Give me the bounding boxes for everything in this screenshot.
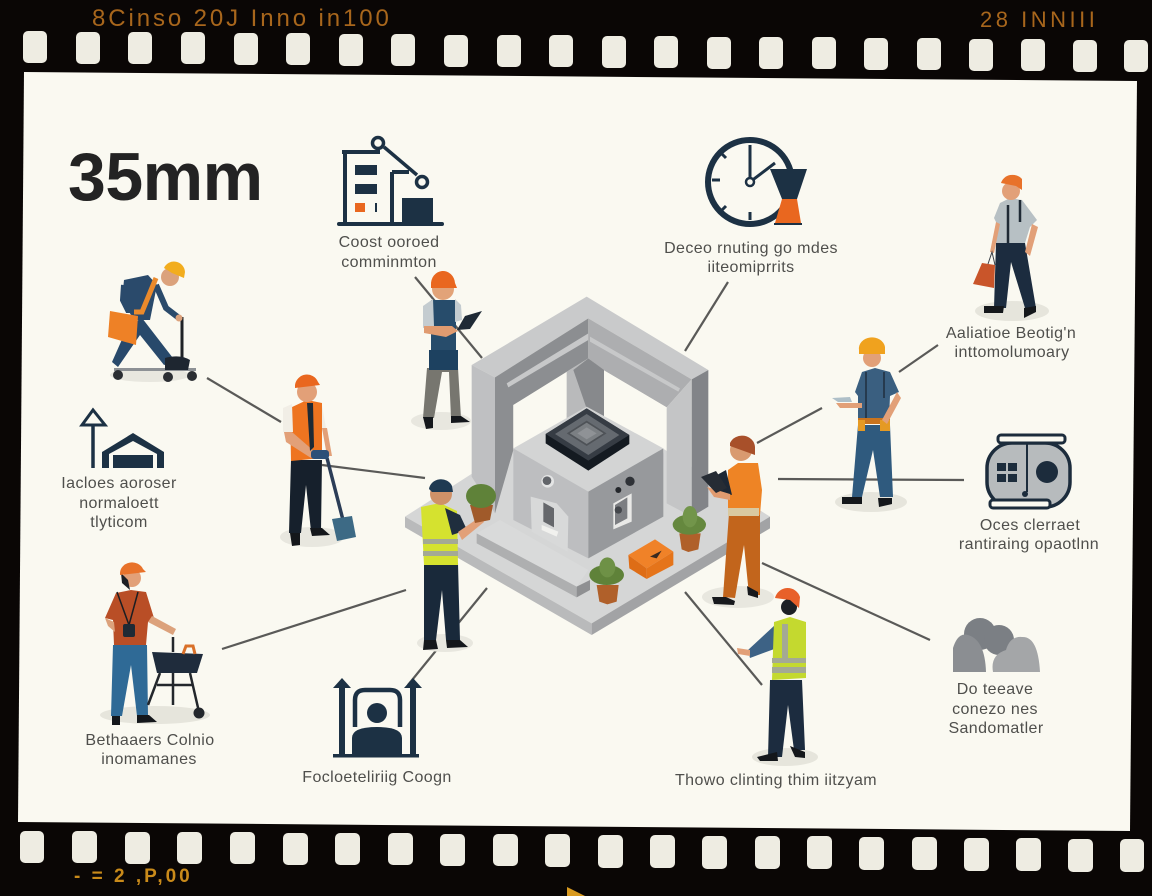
- base plinth: [405, 400, 770, 635]
- worker: orange vest with shovel: [280, 375, 356, 547]
- label: house: normaloett: [79, 495, 159, 512]
- concrete cube: [513, 407, 663, 558]
- label: cost: Coost ooroed: [339, 234, 439, 251]
- icon: arrow and house: [82, 410, 164, 468]
- worker: left with grill: [100, 562, 210, 725]
- label: boiler: rantiraing opaotlnn: [959, 536, 1099, 553]
- label: rocks: Do teeave: [957, 681, 1033, 698]
- label: house: Iacloes aoroser: [61, 475, 177, 492]
- icon: portal with figure: [333, 678, 422, 758]
- film edge text top left: 8Cinso 20J Inno in100: [92, 5, 392, 32]
- label: routing: iiteomiprrits: [708, 259, 794, 276]
- worker: right blue uniform: [832, 337, 907, 512]
- top sprocket holes: [23, 31, 1148, 72]
- icon: factory with crane arm: [337, 138, 444, 226]
- film edge text top right: 28 INNIII: [980, 7, 1098, 32]
- orange toolbox: [628, 539, 673, 579]
- dark plate on cube: [546, 408, 629, 471]
- label: portal: Focloeteliriig Coogn: [302, 769, 452, 786]
- plant front: [589, 557, 624, 604]
- label: climbing: Thowo clinting thim iitzyam: [675, 772, 877, 789]
- central isometric building: [405, 297, 770, 635]
- arch frame: [472, 297, 708, 517]
- worker: top right with bag: [973, 175, 1049, 321]
- worker: apron with clipboard: [411, 271, 482, 430]
- label: grill: inomamanes: [101, 751, 197, 768]
- label: rocks: Sandomatler: [948, 720, 1044, 737]
- icon: clock and hourglass: [708, 140, 807, 225]
- connector lines: [207, 277, 964, 685]
- film edge marker triangle: [567, 887, 585, 896]
- label: design: inttomolumoary: [955, 344, 1069, 361]
- icon: boiler: [987, 435, 1070, 508]
- icon: rock pile: [953, 618, 1040, 672]
- worker: yellow vest holding plant: [417, 479, 496, 652]
- title: 35mm: [68, 139, 263, 215]
- label: house: tlyticom: [90, 514, 148, 531]
- label: design: Aaliatioe Beotig'n: [946, 325, 1076, 342]
- plant right: [673, 506, 706, 552]
- worker: bottom right yellow vest: [737, 588, 818, 766]
- label: routing: Deceo rnuting go mdes: [664, 240, 838, 257]
- label: boiler: Oces clerraet: [980, 517, 1080, 534]
- label: grill: Bethaaers Colnio: [85, 732, 215, 749]
- worker: orange trousers with tablet: [701, 436, 774, 608]
- worker: scooter rider: [108, 262, 197, 382]
- label: rocks: conezo nes: [952, 701, 1038, 718]
- bottom sprocket holes: [20, 831, 1144, 872]
- label: cost: comminmton: [341, 254, 437, 271]
- film edge text bottom left: - = 2 ,P,00: [74, 866, 193, 887]
